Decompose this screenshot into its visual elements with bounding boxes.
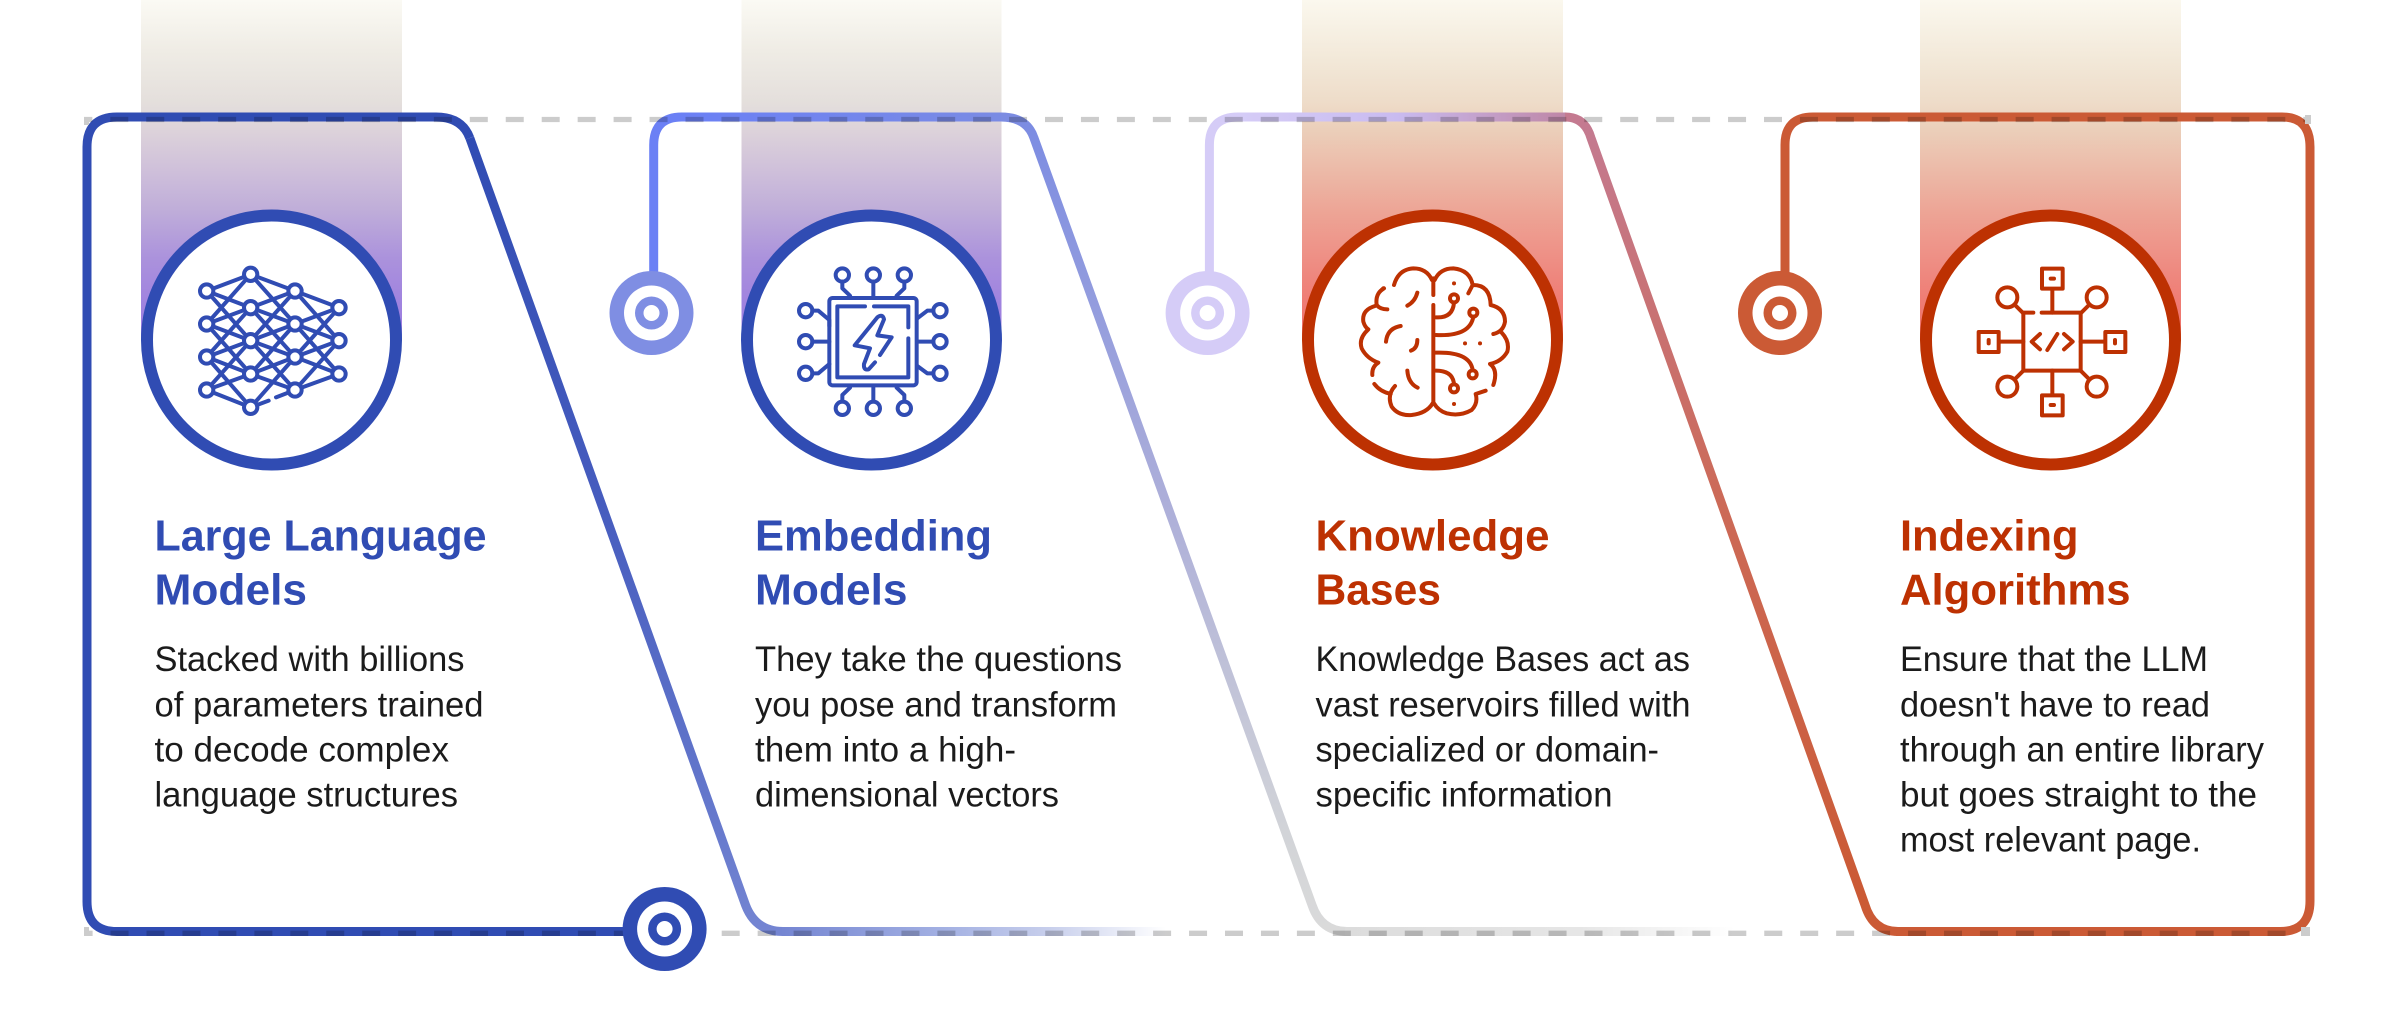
heading [1316,512,1550,614]
panel: embedding models [747,216,1122,814]
icon: neural network [200,268,346,414]
node: step 1 [623,887,707,971]
heading: Models [154,566,307,614]
icon ring [747,216,996,464]
frame: embedding models [654,117,1735,932]
icon: ai chip [799,268,947,415]
description: language structures [154,774,458,814]
heading [154,512,486,614]
icon: brain [1361,268,1508,415]
node: step 4 [1738,271,1822,355]
description: but goes straight to the [1900,774,2257,814]
frame: large language models [87,117,1166,932]
description: doesn't have to read [1900,684,2210,724]
background bands [141,0,2181,340]
heading: Algorithms [1900,566,2130,614]
description: to decode complex [154,730,449,770]
description [1900,639,2264,860]
frame: knowledge bases [1209,117,1898,932]
description [1316,639,1690,814]
panel: indexing algorithms [1900,216,2264,860]
description: dimensional vectors [755,774,1059,814]
band: embedding models [742,0,1002,340]
description [755,639,1122,814]
panel: large language models [147,216,486,814]
heading: Large Language [154,512,486,560]
heading: Embedding [755,512,992,560]
heading: Bases [1316,566,1441,614]
heading [755,512,992,614]
icon ring [147,216,396,464]
description: most relevant page. [1900,820,2201,860]
description: them into a high- [755,730,1016,770]
description [154,639,484,814]
description: Knowledge Bases act as [1316,639,1690,679]
description: through an entire library [1900,730,2264,770]
heading: Indexing [1900,512,2078,560]
band: knowledge bases [1302,0,1563,340]
panel: knowledge bases [1308,216,1690,814]
band: large language models [141,0,402,340]
description: Stacked with billions [154,639,464,679]
description: you pose and transform [755,684,1117,724]
heading: Models [755,566,908,614]
icon ring [1308,216,1557,464]
description: of parameters trained [154,684,484,724]
icon ring [1926,216,2175,464]
icon: code network [1979,269,2125,415]
description: vast reservoirs filled with [1316,684,1690,724]
description: specialized or domain- [1316,730,1659,770]
heading: Knowledge [1316,512,1550,560]
description: They take the questions [755,639,1122,679]
heading [1900,512,2130,614]
node: step 2 [610,271,694,355]
guide corners [84,115,2311,936]
frame: indexing algorithms [1785,117,2310,932]
band: indexing algorithms [1920,0,2181,340]
description: Ensure that the LLM [1900,639,2208,679]
node: step 3 [1166,271,1250,355]
description: specific information [1316,774,1612,814]
dashed guide lines [84,120,2310,933]
